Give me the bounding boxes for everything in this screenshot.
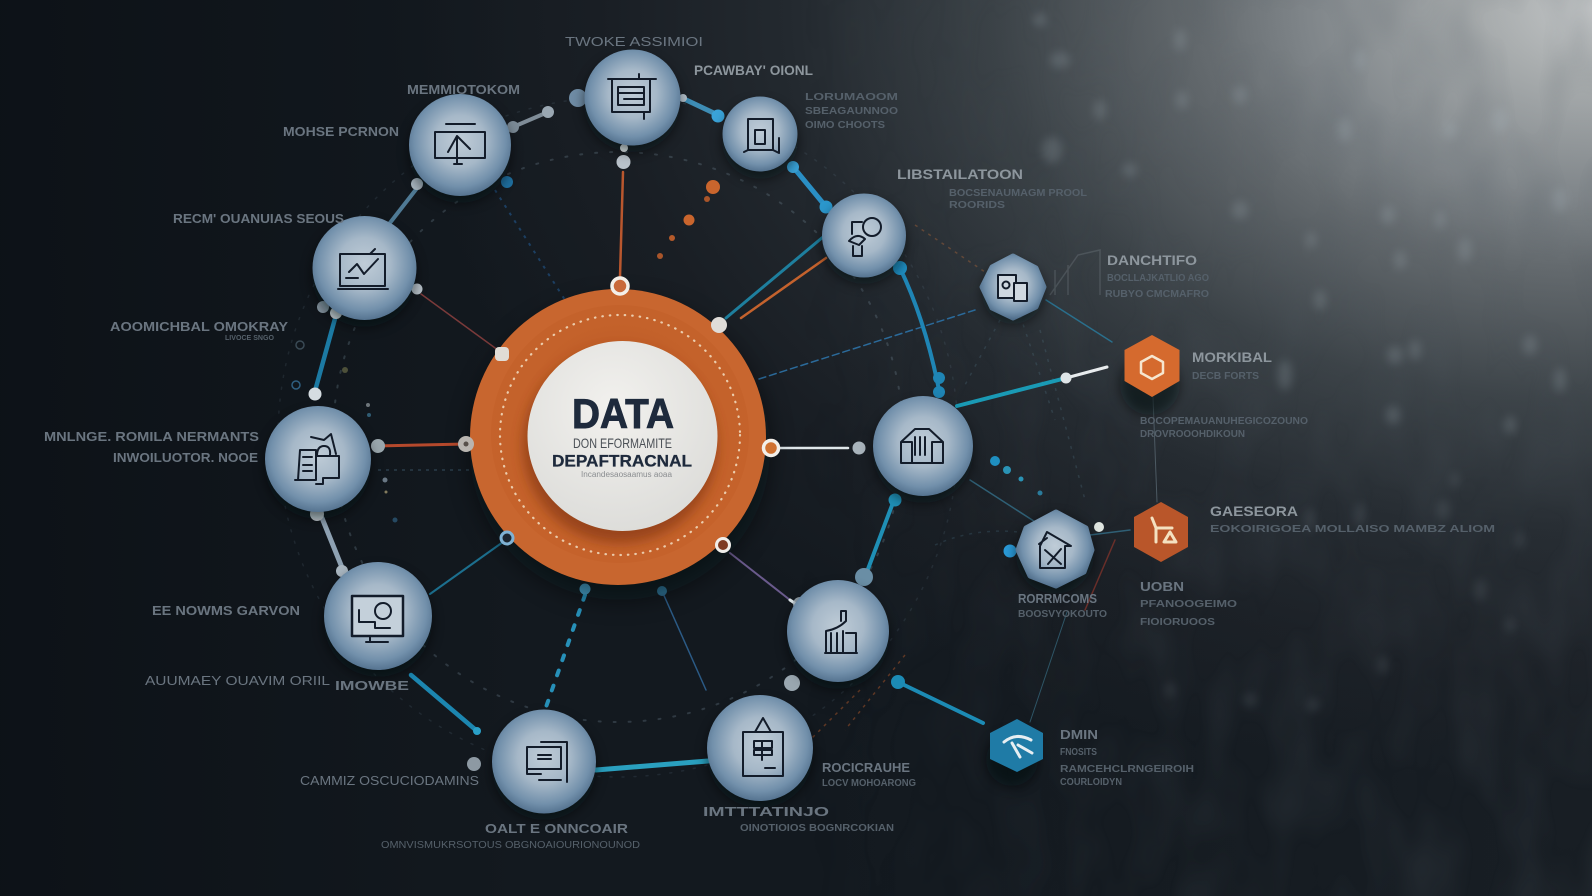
- label: moribal detail: DECB FORTS: [1192, 370, 1259, 382]
- sphere: [492, 710, 596, 814]
- sphere: [1018, 512, 1092, 586]
- connector lines: [315, 98, 1157, 770]
- label: uobn: [1140, 579, 1237, 628]
- hub title: DATA: [572, 390, 674, 437]
- sphere: [982, 256, 1044, 318]
- sphere: [822, 194, 906, 278]
- white disc shadow: [523, 349, 717, 543]
- label: liberation details: ROORIDS: [949, 199, 1005, 211]
- label: mnlnge: MNLNGE. ROMILA NERMANTS: [44, 429, 259, 444]
- hub caption: Incandesaosaamus aoaa: [581, 470, 673, 479]
- background: [598, 0, 1592, 896]
- hub shadow: [470, 300, 770, 600]
- dotted ring: [500, 315, 740, 555]
- label: dmin: COURLOIDYN: [1060, 776, 1122, 788]
- icon: document frame: [608, 74, 656, 119]
- central hub: [458, 278, 778, 600]
- dotted orbit rings: [278, 97, 1100, 777]
- node: top: [584, 50, 680, 146]
- labels: bottom: [300, 760, 916, 851]
- connector: center to lower-left node: [430, 542, 503, 594]
- label: dmin: DMIN: [1060, 727, 1098, 742]
- icon: open book: [744, 119, 779, 153]
- node: upper left: [409, 94, 511, 196]
- label: danchtifo details: RUBYO CMCMAFRO: [1105, 288, 1209, 300]
- sphere: [873, 396, 973, 496]
- icon: eye arrow: [1004, 736, 1032, 757]
- label: imttatinjo: IMTTTATINJO: [703, 804, 829, 819]
- label: liberation heading: LIBSTAILATOON: [897, 166, 1023, 182]
- connector dots: [308, 89, 1104, 771]
- icon: sketch page: [1039, 532, 1071, 568]
- node: left upper: [312, 216, 416, 320]
- label: gaeseora heading: GAESEORA: [1210, 503, 1298, 519]
- hexagon: orange lower: [1134, 502, 1188, 562]
- sphere shadows: [265, 56, 1180, 820]
- icon: magnifier figure: [849, 218, 881, 256]
- label: upper right details: SBEAGAUNNOO: [805, 105, 898, 117]
- outer orange disc: [470, 289, 766, 585]
- node: lower right: [787, 580, 889, 682]
- icon: factory: [825, 611, 857, 653]
- label: auumaey: AUUMAEY OUAVIM ORIIL: [145, 673, 330, 688]
- node: bottom right: [707, 695, 813, 801]
- label: upper right details: OIMO CHOOTS: [805, 119, 885, 131]
- connector: dotted center to lower node: [545, 595, 585, 710]
- sphere: [324, 562, 432, 670]
- icon: two cards: [998, 275, 1027, 301]
- hub handles: [458, 278, 778, 552]
- connector: center to bottom node: [662, 591, 706, 690]
- hexagon: orange upper: [1124, 335, 1180, 397]
- labels: right side: [1018, 252, 1495, 788]
- icon: tagged document: [743, 718, 783, 776]
- label: inwoiluotor: INWOILUOTOR. NOOE: [113, 450, 258, 465]
- inner orange disc: [491, 305, 749, 563]
- label: rocicrauhe: LOCV MOHOARONG: [822, 777, 916, 789]
- icon: desk with lamp: [295, 434, 339, 484]
- connector: center to left-upper node: [421, 294, 502, 353]
- label: liberation details: BOCSENAUMAGM PROOL: [949, 187, 1088, 199]
- connector: center to top node: [620, 172, 623, 277]
- label: uobn: PFANOOGEIMO: [1140, 598, 1237, 610]
- label: danchtifo details: [1105, 272, 1209, 300]
- icon: stacked screens: [527, 742, 567, 782]
- label: mid details: DROVROOOHDIKOUN: [1140, 428, 1245, 440]
- sphere: [312, 216, 416, 320]
- label: moribal heading: MORKIBAL: [1192, 349, 1272, 365]
- label: gaeseora detail: EOKOIRIGOEA MOLLAISO MAMBZ ALIOM: [1210, 523, 1495, 535]
- label: upper left: MEMMIOTOKOM: [407, 82, 520, 97]
- label: aoomichbal: AOOMICHBAL OMOKRAY: [110, 319, 288, 334]
- labels: left side: [44, 211, 409, 693]
- connector: center to left node: [378, 444, 466, 446]
- outer links: [315, 98, 1157, 770]
- icon: archive box: [901, 429, 943, 463]
- hub overline: DON EFORMAMITE: [573, 435, 672, 451]
- label: upper left 2: MOHSE PCRNON: [283, 124, 399, 139]
- label: aoomichbal: [110, 319, 288, 342]
- label: imttatinjo: [703, 804, 894, 834]
- label: danchtifo details: BOCLLAJKATLIO AGO: [1107, 272, 1209, 284]
- node: bottom: [492, 710, 596, 814]
- sphere: [707, 695, 813, 801]
- sphere: [409, 94, 511, 196]
- icon: board diagram: [435, 124, 485, 164]
- label: upper right details: LORUMAOOM: [805, 91, 898, 103]
- label: liberation details: [949, 187, 1088, 211]
- node: right: [873, 396, 973, 496]
- label: imowbe: IMOWBE: [335, 678, 409, 693]
- hexagon shape: [990, 719, 1043, 772]
- connector: ring to far node: [759, 310, 975, 379]
- label: dmin: FNOSITS: [1060, 746, 1097, 758]
- label: oalt e onncoair: [381, 821, 640, 851]
- label: top node: TWOKE ASSIMIOI: [565, 34, 703, 49]
- node: right upper: [822, 194, 906, 278]
- label: uobn: UOBN: [1140, 579, 1184, 594]
- connector: center to upper-right node: [726, 237, 826, 318]
- node: left: [265, 406, 371, 512]
- label: oalt e onncoair: OMNVISMUKRSOTOUS OBGNOAIOURIONOUNOD: [381, 839, 640, 851]
- icon: figure: [1152, 518, 1176, 542]
- icon: shield: [1141, 356, 1163, 379]
- label: rorrmcoms: [1018, 591, 1107, 620]
- label: dmin: RAMCEHCLRNGEIROIH: [1060, 763, 1194, 775]
- sphere: [722, 96, 798, 172]
- label: mid details: [1140, 415, 1308, 440]
- sphere: [584, 50, 680, 146]
- label: aoomichbal: LIVOCE SNGO: [225, 335, 275, 342]
- white disc: [528, 341, 718, 531]
- labels: top area: [283, 34, 1088, 211]
- icon: monitor: [352, 596, 403, 642]
- hub subtitle: DEPAFTRACNAL: [552, 452, 692, 470]
- hexagon shape: [1124, 335, 1180, 397]
- hexagon: blue: [990, 719, 1043, 772]
- node: right lower: [1018, 512, 1092, 586]
- label: upper right heading: PCAWBAY' OIONL: [694, 62, 813, 78]
- label: dmin: [1060, 727, 1194, 788]
- label: upper right details: [805, 91, 898, 131]
- connector: center to lower-right node: [730, 553, 805, 610]
- hexagon shape: [1134, 502, 1188, 562]
- label: oalt e onncoair: OALT E ONNCOAIR: [485, 821, 629, 836]
- sphere: [265, 406, 371, 512]
- label: recm: RECM' OUANUIAS SEOUS: [173, 211, 344, 226]
- label: cammiz: CAMMIZ OSCUCIODAMINS: [300, 773, 479, 788]
- label: rorrmcoms: RORRMCOMS: [1018, 591, 1097, 606]
- connector: center to right node: [780, 447, 848, 449]
- label: danchtifo heading: DANCHTIFO: [1107, 252, 1197, 268]
- label: ee nowms: EE NOWMS GARVON: [152, 603, 300, 618]
- icon: laptop with check: [338, 249, 388, 289]
- label: imttatinjo: OINOTIOIOS BOGNRCOKIAN: [740, 822, 894, 834]
- node: upper right: [722, 96, 798, 172]
- node: lower left: [324, 562, 432, 670]
- label: rocicrauhe: [822, 760, 916, 789]
- sphere: [787, 580, 889, 682]
- label: mid details: BOCOPEMAUANUHEGICOZOUNO: [1140, 415, 1308, 427]
- node: far right small: [982, 256, 1044, 318]
- label: rocicrauhe: ROCICRAUHE: [822, 760, 910, 775]
- label: rorrmcoms: BOOSVYOKOUTO: [1018, 608, 1107, 620]
- label: uobn: FIOIORUOOS: [1140, 616, 1215, 628]
